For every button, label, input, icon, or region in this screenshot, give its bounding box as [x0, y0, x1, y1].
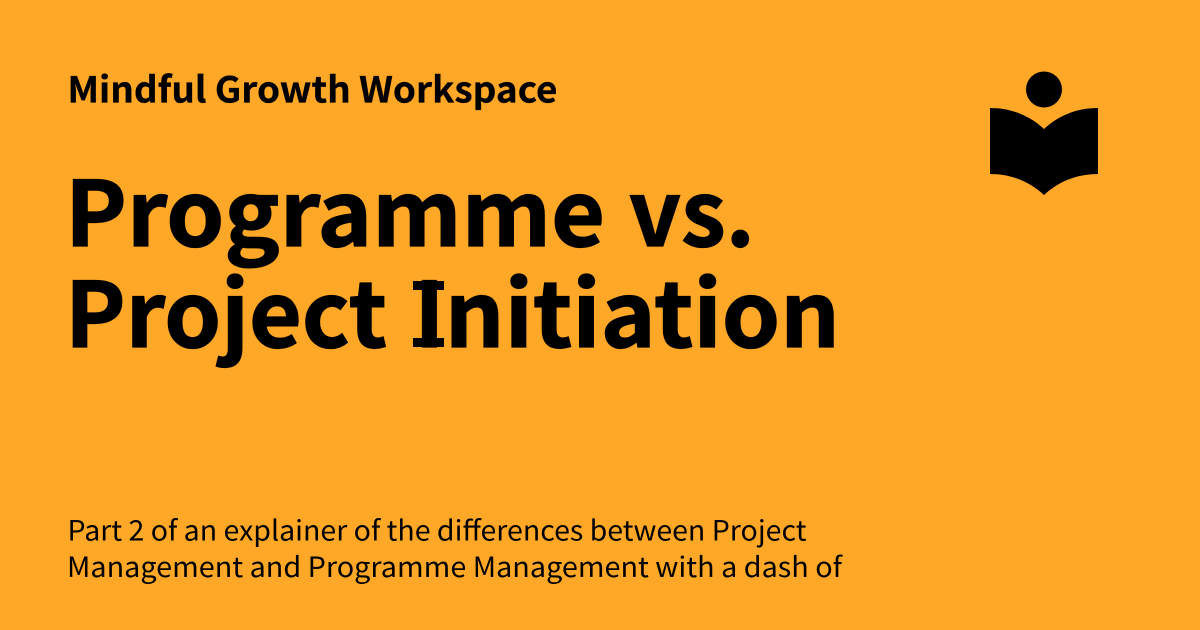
- description text: Part 2 of an explainer of the differences between Project: [68, 510, 807, 550]
- title: Project: [65, 243, 387, 373]
- title: [65, 142, 840, 373]
- description text: Management and Programme Management with a dash of: [67, 546, 843, 586]
- title: Programme: [65, 142, 605, 272]
- description text: [67, 510, 843, 586]
- title: Initiation: [414, 243, 840, 373]
- icon: person reading book: [990, 72, 1098, 195]
- brand name: Mindful Growth Workspace: [68, 62, 558, 114]
- title: vs.: [629, 142, 755, 272]
